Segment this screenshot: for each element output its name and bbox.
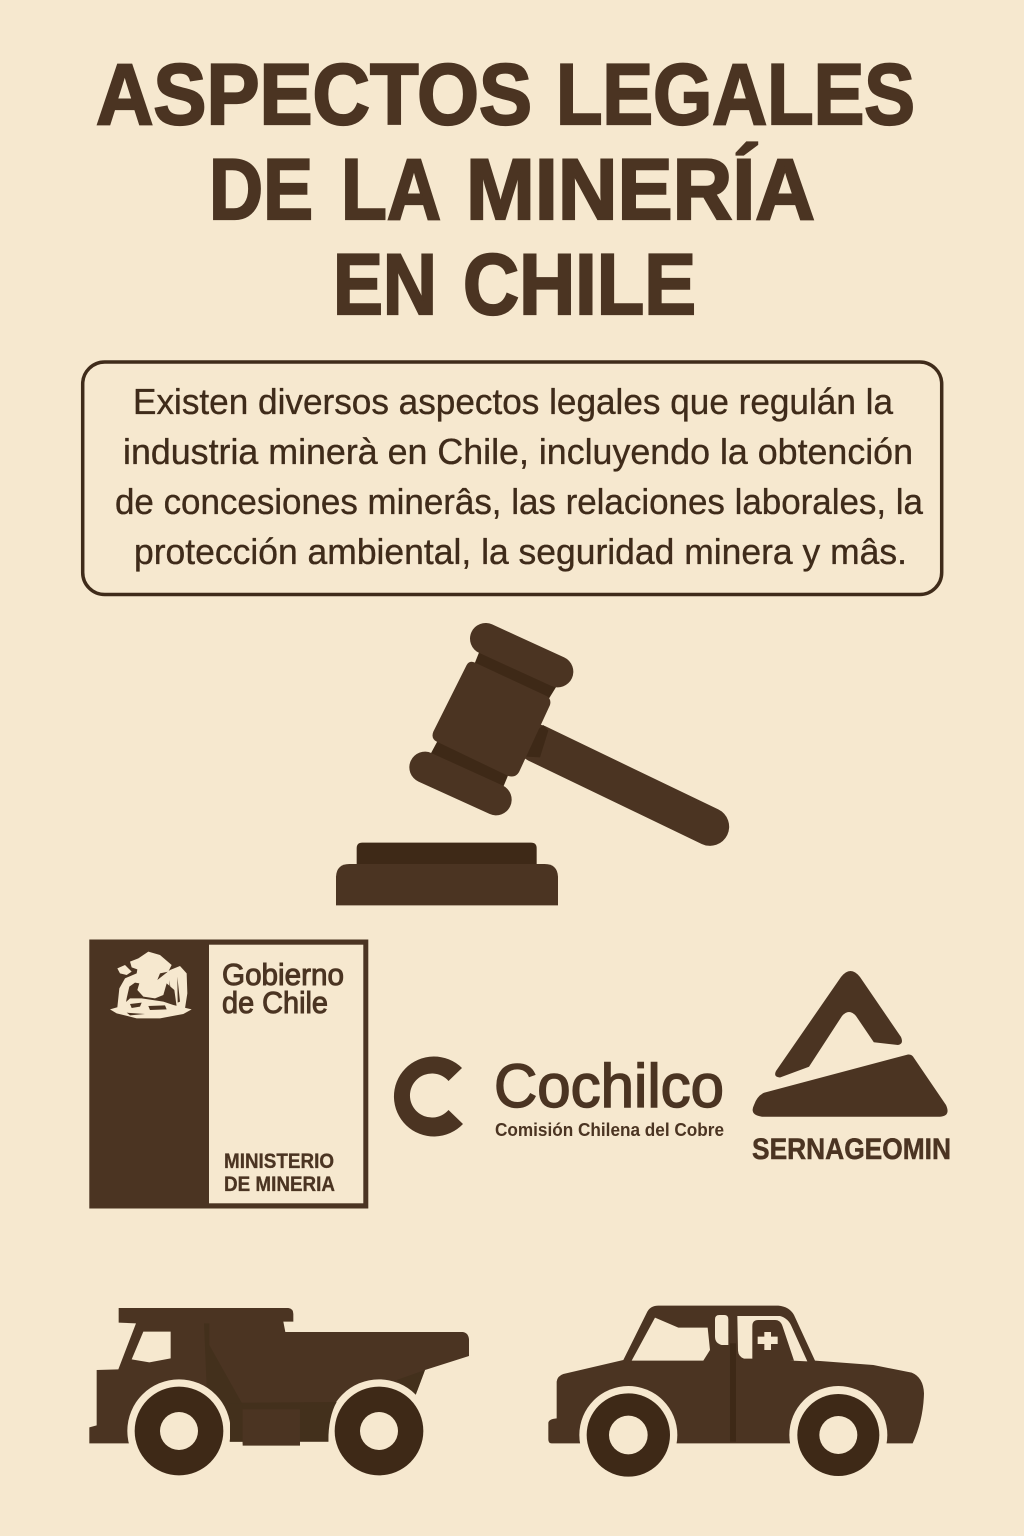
icon: mining truck xyxy=(89,1308,469,1484)
logo: Cochilco xyxy=(394,1052,724,1140)
title: LA xyxy=(341,142,441,238)
title: MINERÍA xyxy=(466,142,815,238)
text: Ministerio de Minería: DE MINERIA xyxy=(224,1173,335,1196)
text block: intro paragraph: protección ambiental, la seguridad minera y mâs. xyxy=(134,531,907,572)
text: Ministerio de Minería: MINISTERIO xyxy=(224,1150,334,1173)
text: Comisión Chilena del Cobre: Comisión Chilena del Cobre xyxy=(495,1120,724,1140)
text block: intro paragraph: Existen diversos aspectos legales que regulán la xyxy=(133,381,894,422)
icon: mountain top xyxy=(775,971,902,1078)
text: Gobierno de Chile: de Chile xyxy=(222,985,328,1020)
logo: Gobierno de Chile, Ministerio de Minería xyxy=(89,940,368,1208)
text block: intro paragraph: industria minerà en Chile, incluyendo la obtención xyxy=(123,431,913,472)
icon: medical cross xyxy=(758,1332,778,1350)
text: Ministerio de Minería xyxy=(224,1150,335,1196)
title: LEGALES xyxy=(556,47,915,143)
icon: rescue vehicle xyxy=(548,1306,924,1484)
text: SERNAGEOMIN: SERNAGEOMIN xyxy=(752,1133,951,1166)
icon: gavel xyxy=(336,639,710,905)
icon: Cochilco C xyxy=(394,1057,463,1137)
panel: intro text xyxy=(83,362,942,594)
title: DE xyxy=(209,142,313,238)
title: EN xyxy=(333,237,437,333)
title xyxy=(96,47,915,333)
icon: mountain base xyxy=(753,1054,948,1117)
text: Cochilco name: Cochilco xyxy=(494,1052,724,1120)
icon: coat of arms xyxy=(110,952,192,1018)
logo: Sernageomin xyxy=(752,971,951,1166)
text: Gobierno de Chile xyxy=(222,957,344,1020)
text block: intro paragraph: de concesiones minerâs, las relaciones laborales, la xyxy=(115,481,924,522)
text: Gobierno de Chile: Gobierno xyxy=(222,957,344,992)
title: CHILE xyxy=(463,237,696,333)
title: ASPECTOS xyxy=(96,47,532,143)
text block: intro paragraph xyxy=(115,381,924,572)
